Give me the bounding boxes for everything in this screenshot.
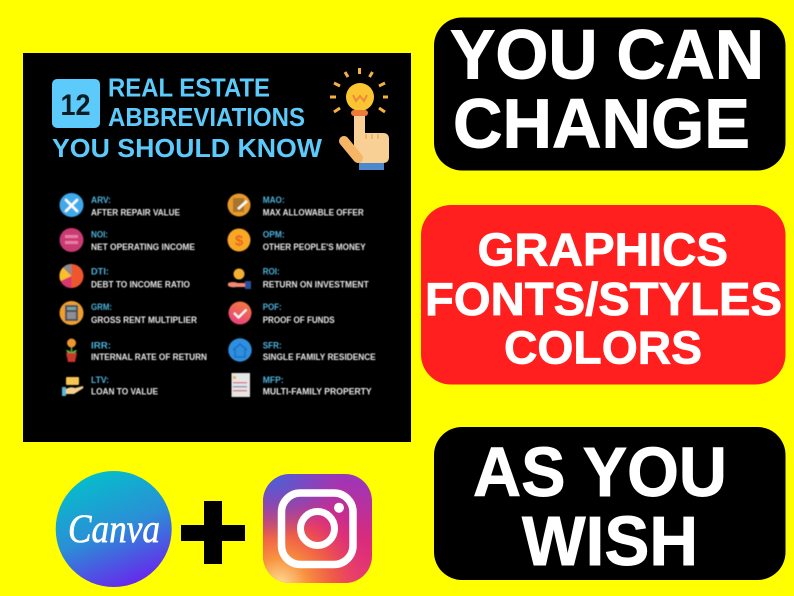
- item: LTV: LOAN TO VALUE: [91, 386, 158, 398]
- item: OPM: [228, 228, 366, 253]
- item: NOI: NET OPERATING INCOME: [91, 242, 195, 253]
- callout: graphics, fonts/styles, colors: COLORS: [504, 321, 702, 373]
- icon: check mark: [228, 302, 252, 324]
- item: MFP: MFP:: [263, 375, 284, 386]
- item list: right column: [228, 194, 376, 398]
- item: POF: POF:: [263, 302, 282, 313]
- icon: calculator: [60, 301, 84, 325]
- heading: REAL ESTATE: [108, 75, 270, 103]
- item: ARV: ARV:: [91, 195, 111, 206]
- heading badge: 12: 12: [60, 89, 90, 122]
- callout: graphics, fonts/styles, colors: [421, 205, 786, 384]
- callout: you can change: [434, 15, 786, 170]
- item: IRR: IRR:: [91, 340, 111, 352]
- heading: [52, 75, 323, 163]
- item: POF: PROOF OF FUNDS: [263, 315, 335, 326]
- item: MFP: [232, 373, 372, 398]
- item: GRM: GRM:: [91, 302, 112, 313]
- item: DTI: DTI:: [91, 266, 109, 278]
- item: DTI: [59, 264, 190, 290]
- item: DTI: DEBT TO INCOME RATIO: [91, 280, 190, 290]
- callout: you can change: CHANGE: [453, 84, 750, 162]
- item: LTV: [62, 375, 158, 398]
- item: SFR: SFR:: [263, 340, 282, 352]
- item: OPM: OPM:: [263, 230, 285, 240]
- icon: signed offer: [228, 194, 250, 216]
- icon: property document: [232, 373, 250, 397]
- item: MFP: MULTI-FAMILY PROPERTY: [263, 386, 372, 398]
- icon: hand holding money: [62, 377, 83, 396]
- icon: Canva logo: [56, 471, 172, 587]
- heading badge: 12: [52, 79, 100, 128]
- item list: left column: [59, 193, 207, 398]
- item: POF: [228, 302, 335, 326]
- icon: dollar coin: $: [235, 232, 244, 250]
- icon: Instagram logo: [263, 474, 372, 583]
- panel: real estate abbreviations: [23, 53, 411, 442]
- callout: graphics, fonts/styles, colors: GRAPHICS: [478, 224, 728, 276]
- icon: potted plant: [66, 338, 77, 362]
- icon: income: [60, 228, 84, 252]
- callout: as you wish: WISH: [522, 502, 698, 580]
- icon: pie chart: [59, 264, 84, 288]
- item: NOI: NOI:: [91, 230, 108, 240]
- item: MAO: MAO:: [263, 195, 285, 206]
- icon: plus sign: [181, 501, 245, 564]
- icon: Canva logo: Canva: [68, 506, 160, 551]
- heading: ABBREVIATIONS: [108, 104, 305, 132]
- icon: hand pressing light bulb: [330, 68, 389, 170]
- callout: as you wish: AS YOU: [473, 433, 727, 511]
- item: GRM: GROSS RENT MULTIPLIER: [91, 315, 197, 326]
- item: IRR: [66, 338, 207, 363]
- callout: graphics, fonts/styles, colors: FONTS/STYLES: [425, 273, 782, 325]
- item: LTV: LTV:: [91, 375, 109, 386]
- callout: as you wish: [434, 427, 786, 580]
- item: IRR: INTERNAL RATE OF RETURN: [91, 352, 207, 363]
- item: NOI: [60, 228, 195, 253]
- heading: YOU SHOULD KNOW: [52, 135, 323, 163]
- item: ARV: AFTER REPAIR VALUE: [91, 208, 180, 218]
- icon: house: [228, 338, 252, 362]
- item: ROI: RETURN ON INVESTMENT: [263, 280, 369, 290]
- item: OPM: OTHER PEOPLE'S MONEY: [263, 242, 366, 253]
- icon: coin over hand: [228, 268, 251, 289]
- item: ROI: [228, 266, 369, 290]
- item: SFR: SINGLE FAMILY RESIDENCE: [263, 352, 376, 363]
- item: ARV: [60, 193, 180, 218]
- item: ROI: ROI:: [263, 266, 280, 278]
- item: GRM: [60, 301, 197, 326]
- item: SFR: [228, 338, 376, 363]
- icon: tools: [60, 193, 84, 217]
- callout: you can change: YOU CAN: [450, 15, 764, 93]
- item: MAO: MAX ALLOWABLE OFFER: [263, 208, 364, 218]
- item: MAO: [228, 194, 364, 218]
